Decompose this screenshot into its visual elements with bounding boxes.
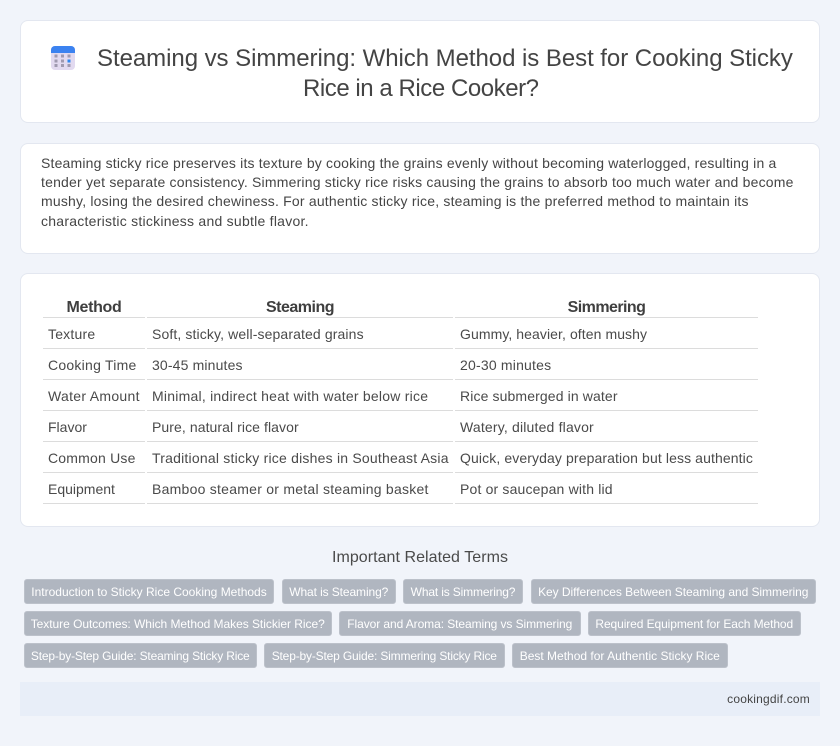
intro text: tender yet separate consistency. Simmering sticky rice risks causing the grains to absorb too much water and become — [41, 174, 794, 190]
related terms tags: Step-by-Step Guide: Simmering Sticky Rice — [272, 649, 497, 663]
footer bar — [20, 682, 820, 716]
related terms tags: Step-by-Step Guide: Steaming Sticky Rice — [31, 649, 250, 663]
comparison table: Rice submerged in water — [460, 388, 618, 404]
comparison table: Soft, sticky, well-separated grains — [152, 326, 364, 342]
comparison table: 20-30 minutes — [460, 357, 551, 373]
comparison table: Bamboo steamer or metal steaming basket — [152, 481, 429, 497]
comparison table: Water Amount — [48, 388, 140, 404]
table panel — [20, 273, 820, 527]
intro text: characteristic stickiness and subtle flavor. — [41, 213, 309, 229]
intro text: mushy, losing the desired chewiness. For authentic sticky rice, steaming is the preferred method to maintain its — [41, 193, 749, 209]
comparison table: 30-45 minutes — [152, 357, 243, 373]
related terms tags: What is Steaming? — [289, 585, 388, 599]
title — [97, 45, 793, 102]
footer credit: cookingdif.com — [727, 692, 810, 706]
intro text — [41, 155, 794, 229]
related terms heading: Important Related Terms — [332, 549, 508, 566]
comparison table — [43, 299, 758, 504]
related terms tags — [24, 579, 816, 668]
related terms tags: Flavor and Aroma: Steaming vs Simmering — [347, 617, 572, 631]
intro text: Steaming sticky rice preserves its texture by cooking the grains evenly without becoming waterlogged, resulting in a — [41, 155, 776, 171]
comparison table: Pure, natural rice flavor — [152, 419, 299, 435]
comparison table: Equipment — [48, 481, 115, 497]
intro panel — [20, 143, 820, 254]
related terms tags: Texture Outcomes: Which Method Makes Stickier Rice? — [31, 617, 325, 631]
comparison table: Method — [67, 299, 121, 316]
comparison table: Pot or saucepan with lid — [460, 481, 613, 497]
comparison table: Gummy, heavier, often mushy — [460, 326, 647, 342]
related terms tags: Key Differences Between Steaming and Simmering — [538, 585, 808, 599]
title: Rice in a Rice Cooker? — [303, 75, 539, 102]
comparison table: Texture — [48, 326, 95, 342]
comparison table: Common Use — [48, 450, 136, 466]
comparison table: Minimal, indirect heat with water below rice — [152, 388, 428, 404]
related terms tags: Best Method for Authentic Sticky Rice — [520, 649, 720, 663]
comparison table: Flavor — [48, 419, 87, 435]
comparison table: Watery, diluted flavor — [460, 419, 594, 435]
related terms tags: Introduction to Sticky Rice Cooking Methods — [31, 585, 267, 599]
related terms tags: What is Simmering? — [411, 585, 515, 599]
comparison table: Traditional sticky rice dishes in Southeast Asia — [152, 450, 449, 466]
related terms tags: Required Equipment for Each Method — [595, 617, 793, 631]
comparison table: Cooking Time — [48, 357, 137, 373]
icon: calendar grid — [51, 46, 75, 70]
comparison table: Quick, everyday preparation but less authentic — [460, 450, 753, 466]
title panel — [20, 20, 820, 123]
comparison table: Simmering — [568, 299, 645, 316]
title: Steaming vs Simmering: Which Method is Best for Cooking Sticky — [97, 45, 793, 72]
comparison table: Steaming — [266, 299, 334, 316]
